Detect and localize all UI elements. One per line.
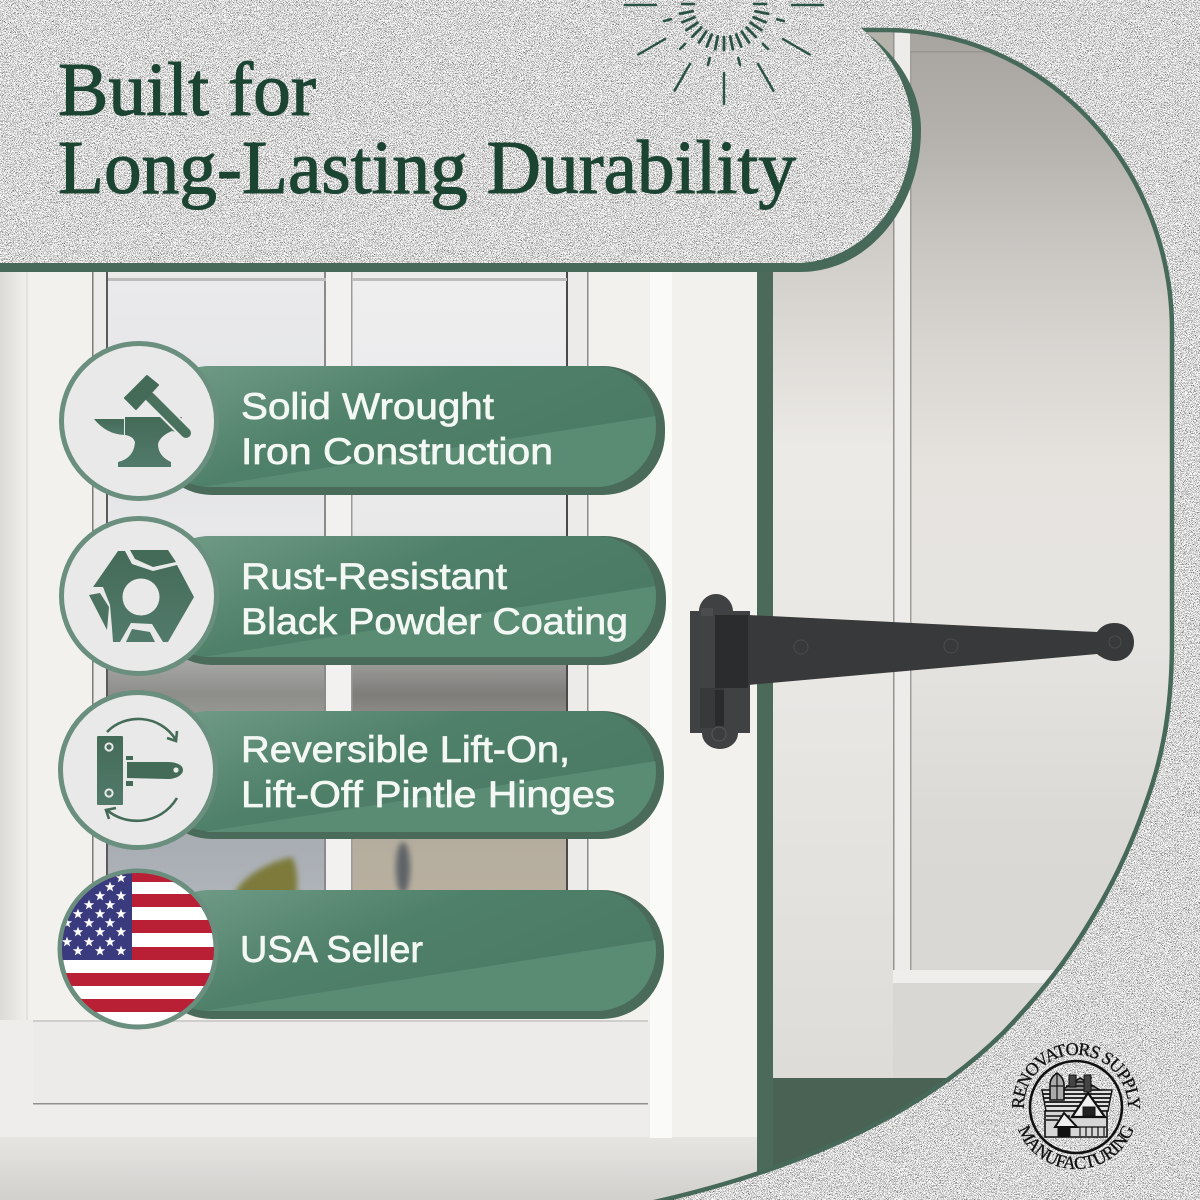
feature pill: rust-resistant: Rust-Resistant xyxy=(241,556,508,597)
feature pill: reversible hinges: Lift-Off Pintle Hinges xyxy=(241,774,615,815)
window sill xyxy=(0,1020,760,1200)
icon: reversible hinge xyxy=(60,692,216,848)
title: Built for xyxy=(58,48,316,132)
feature pill: solid wrought iron xyxy=(150,366,665,495)
feature pill: reversible hinges: Reversible Lift-On, xyxy=(241,729,570,770)
feature pill: rust-resistant: Black Powder Coating xyxy=(241,601,628,642)
door xyxy=(773,30,1193,1200)
feature pill: USA seller: USA Seller xyxy=(240,929,423,970)
green stripe xyxy=(757,272,773,1172)
header panel xyxy=(0,28,921,272)
logo: Renovators Supply Manufacturing xyxy=(1012,1042,1140,1170)
feature pill: solid wrought iron: Iron Construction xyxy=(241,431,553,472)
shutter stile xyxy=(650,270,672,1138)
window wall xyxy=(28,272,757,1137)
hinge xyxy=(690,594,1134,749)
icon: american flag xyxy=(60,870,220,1038)
logo: Renovators Supply Manufacturing: MANUFACTURING xyxy=(1018,1124,1134,1170)
icon: cracked rusted nut xyxy=(62,518,216,674)
title xyxy=(58,48,796,210)
feature pill: reversible hinges xyxy=(150,711,664,839)
window panes xyxy=(92,270,589,910)
feature pill: rust-resistant xyxy=(150,536,666,665)
icon: hammer and anvil xyxy=(62,344,216,498)
title: Long-Lasting Durability xyxy=(58,126,796,210)
sunburst decoration xyxy=(625,4,823,104)
logo: Renovators Supply Manufacturing: RENOVATORS SUPPLY xyxy=(1012,1042,1140,1110)
feature pill: solid wrought iron: Solid Wrought xyxy=(241,386,495,427)
feature pill: USA seller xyxy=(150,890,664,1019)
house drawing xyxy=(1042,1073,1112,1137)
